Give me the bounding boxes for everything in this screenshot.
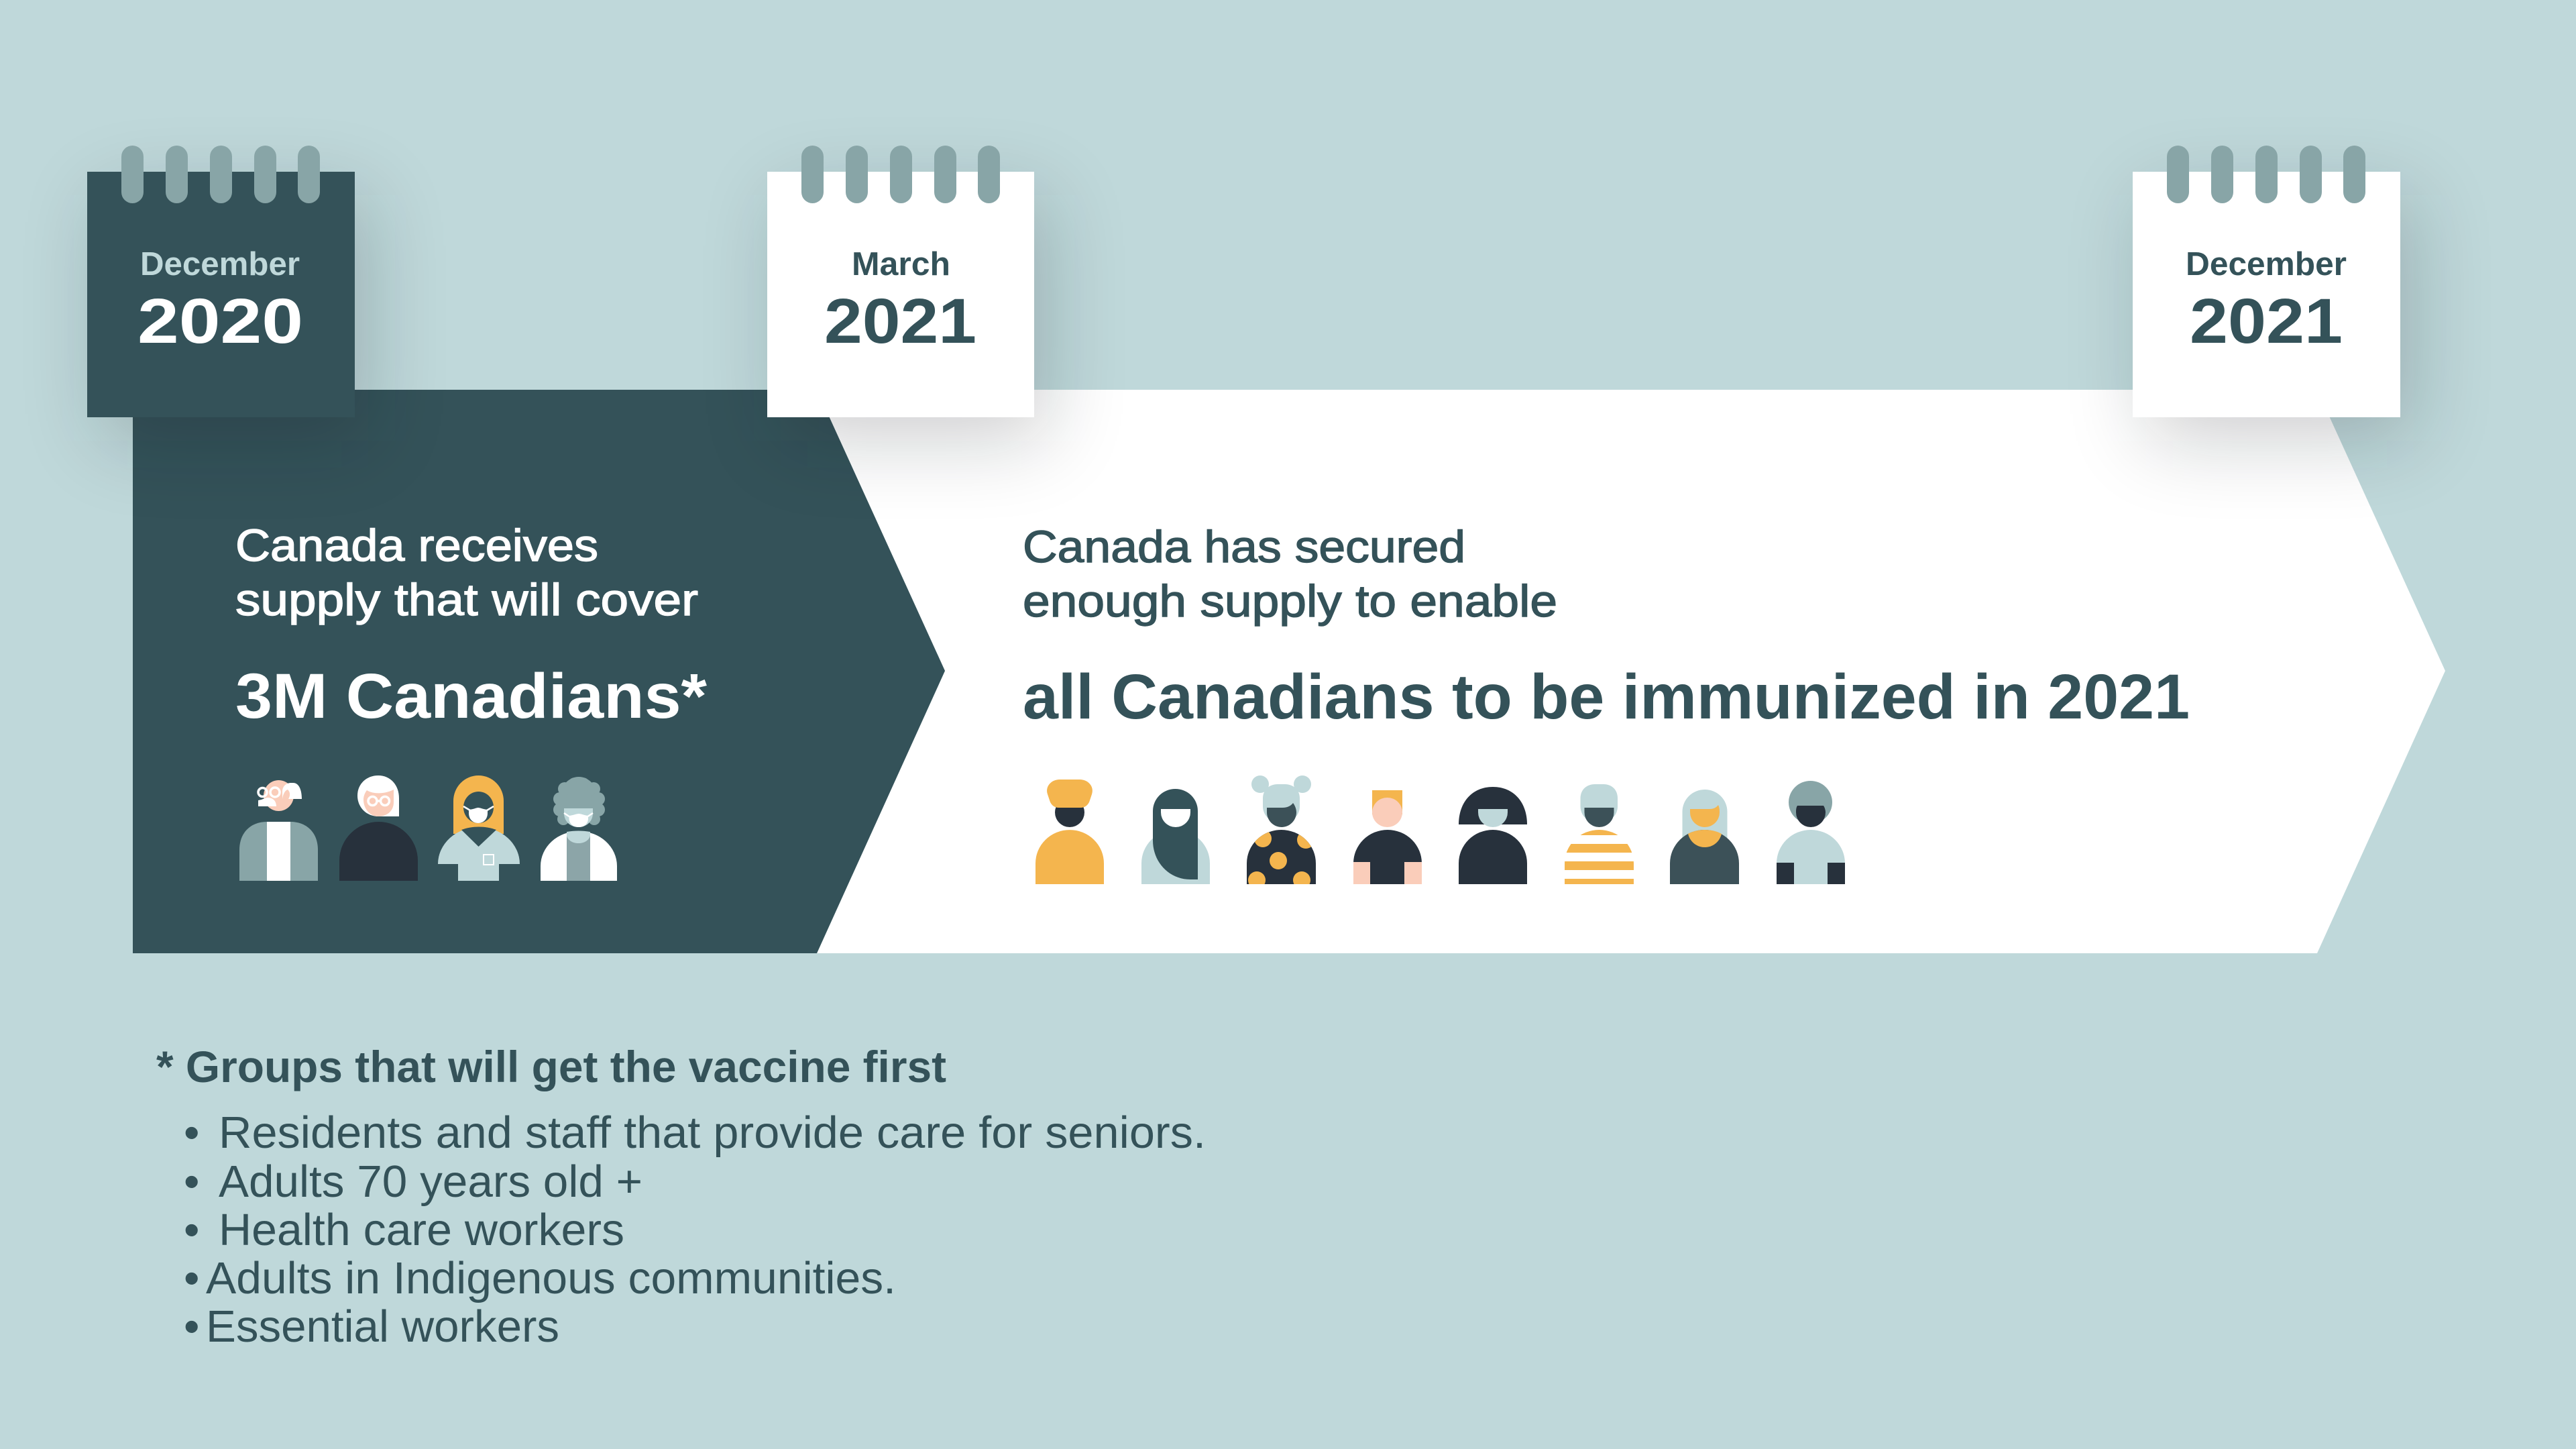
calendar: December 2020: December (140, 246, 300, 282)
people: priority group (239, 775, 617, 881)
icon: person with yellow hat (1035, 780, 1104, 884)
footnote list: • (184, 1108, 199, 1158)
calendar: December 2021 (2133, 146, 2400, 417)
icon: woman with hijab (1141, 789, 1210, 884)
footnote list: Residents and staff that provide care for seniors. (219, 1108, 1206, 1158)
icon: person with short grey hair (1777, 781, 1845, 884)
icon: person with hair buns and polka dots (1247, 775, 1316, 889)
text block: full supply (1023, 522, 2190, 733)
footnote list: Adults in Indigenous communities. (206, 1253, 896, 1303)
white banner arrow (817, 390, 2445, 953)
text block: first delivery: Canada receives (235, 521, 598, 571)
calendar: December 2020 (87, 146, 355, 417)
footnote list: • (184, 1205, 199, 1255)
icon: person with yellow hair and bare arms (1353, 790, 1422, 884)
footnote list: • (184, 1253, 199, 1303)
text block: full supply: Canada has secured (1023, 522, 1465, 572)
calendar: December 2020: 2020 (137, 286, 303, 357)
footnote list: Adults 70 years old + (219, 1157, 642, 1207)
dark banner arrow (133, 390, 945, 953)
text block: first delivery: supply that will cover (235, 575, 698, 625)
icon: senior man with glasses (239, 780, 318, 881)
text block: full supply: all Canadians to be immunized in 2021 (1023, 661, 2190, 733)
icon: person with long light hair (1670, 790, 1739, 884)
icon: woman in white coat with mask (541, 777, 617, 881)
icon: person in striped shirt (1565, 784, 1634, 884)
icon: person with black bob (1459, 787, 1527, 884)
footnote list (184, 1108, 1206, 1352)
calendar: December 2021: December (2186, 246, 2347, 282)
footnote list: • (184, 1301, 199, 1352)
footnote list: Health care workers (219, 1205, 624, 1255)
footnote list: • (184, 1157, 199, 1207)
text block: first delivery: 3M Canadians* (235, 661, 707, 732)
people: all Canadians (1035, 775, 1845, 889)
icon: senior woman with white hair (339, 775, 418, 881)
calendar: March 2021 (767, 146, 1034, 417)
text block: first delivery (235, 521, 707, 732)
footnote heading: * Groups that will get the vaccine first (156, 1042, 946, 1091)
calendar shadows (101, 195, 2414, 441)
calendar: March 2021: March (852, 246, 950, 282)
calendar: March 2021: 2021 (824, 286, 976, 357)
text block: full supply: enough supply to enable (1023, 576, 1557, 627)
calendar: December 2021: 2021 (2190, 286, 2343, 357)
footnote list: Essential workers (206, 1301, 559, 1352)
icon: nurse with mask (438, 775, 520, 881)
